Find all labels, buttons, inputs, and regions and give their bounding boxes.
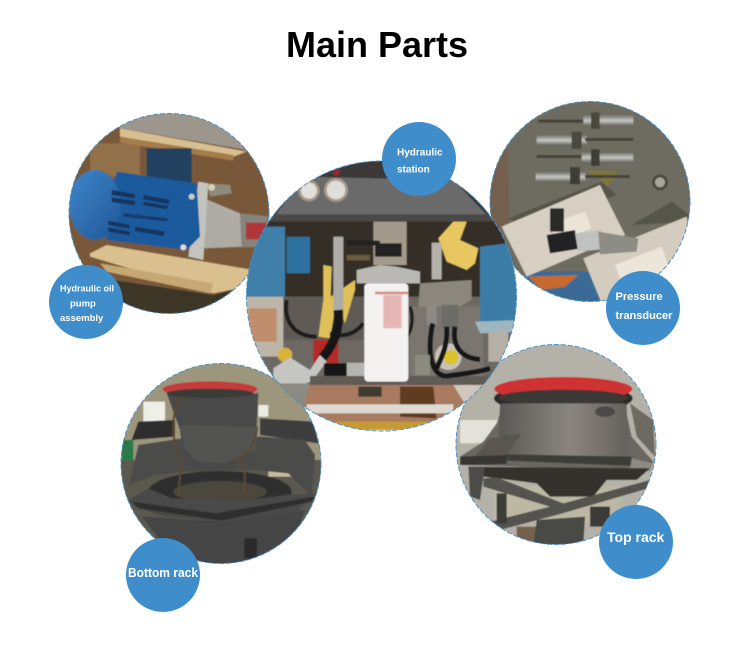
panel: pressure transducer photo (488, 100, 692, 305)
badge: top rack: Top rack (607, 529, 665, 545)
badge: hydraulic station (382, 122, 456, 196)
badge: hydraulic oil pump assembly: pump (70, 298, 96, 310)
badge: hydraulic station: station (397, 164, 430, 176)
badge: pressure transducer: Pressure (616, 291, 663, 303)
panel: top rack photo (453, 343, 660, 547)
badge: bottom rack: Bottom rack (128, 565, 199, 580)
panel: hydraulic station photo (243, 160, 520, 431)
badge: pressure transducer (606, 271, 680, 345)
badge: hydraulic oil pump assembly: assembly (60, 313, 104, 324)
panel: bottom rack photo (118, 362, 325, 570)
badge: hydraulic oil pump assembly (49, 265, 123, 339)
badge: hydraulic station: Hydraulic (397, 148, 443, 158)
badge: hydraulic oil pump assembly: Hydraulic oil (60, 284, 114, 294)
panel: hydraulic oil pump assembly photo (68, 113, 270, 314)
badge: pressure transducer: transducer (616, 310, 673, 322)
infographic: main parts (49, 30, 690, 612)
badge: top rack (599, 505, 673, 579)
title: Main Parts (286, 24, 468, 65)
sensors (536, 112, 633, 187)
badge: bottom rack (126, 538, 200, 612)
